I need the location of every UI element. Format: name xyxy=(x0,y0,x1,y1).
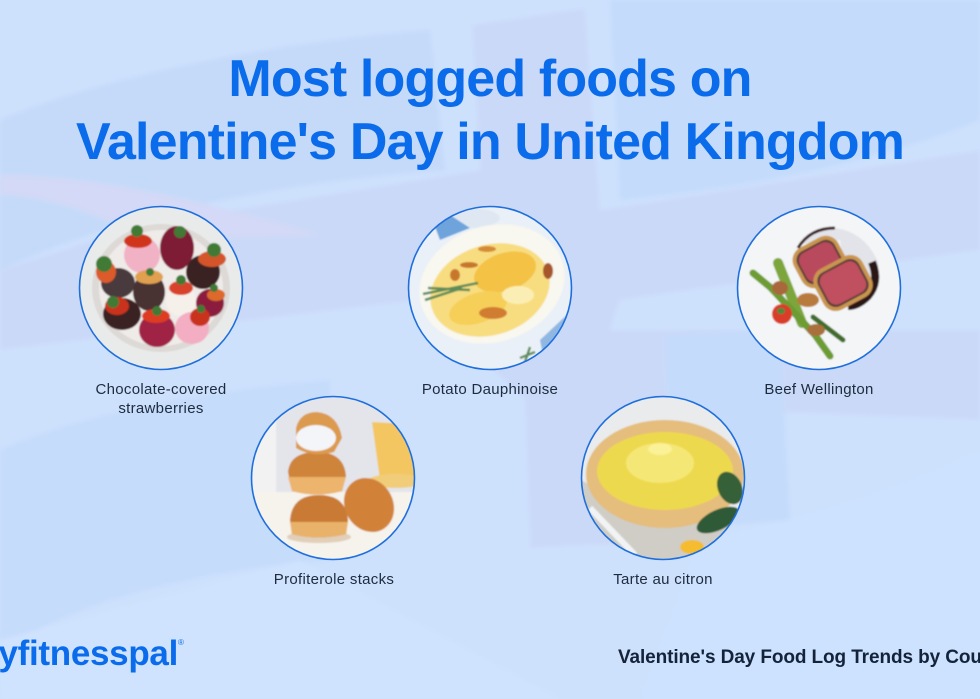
label: potato dauphinoise: Potato Dauphinoise xyxy=(422,381,558,398)
circle outlines xyxy=(80,206,900,560)
icon: profiterole stacks xyxy=(252,397,424,561)
label: tarte au citron: Tarte au citron xyxy=(613,571,713,588)
icon: tarte au citron xyxy=(581,397,748,561)
title: Valentine's Day in United Kingdom xyxy=(76,112,904,170)
logo registered mark: ® xyxy=(178,638,184,647)
label: chocolate-covered strawberries: strawberries xyxy=(118,400,204,417)
icon: beef wellington plate xyxy=(738,206,902,370)
title: Most logged foods on xyxy=(228,50,752,108)
icon: potato dauphinoise dish xyxy=(404,206,580,370)
title xyxy=(76,50,904,170)
label: chocolate-covered strawberries: Chocolate-covered xyxy=(95,381,226,398)
label: profiterole stacks: Profiterole stacks xyxy=(274,571,394,588)
food images xyxy=(78,206,902,560)
icon: chocolate-covered strawberries plate xyxy=(79,206,243,370)
label: chocolate-covered strawberries xyxy=(95,381,226,417)
label: beef wellington: Beef Wellington xyxy=(764,381,874,398)
